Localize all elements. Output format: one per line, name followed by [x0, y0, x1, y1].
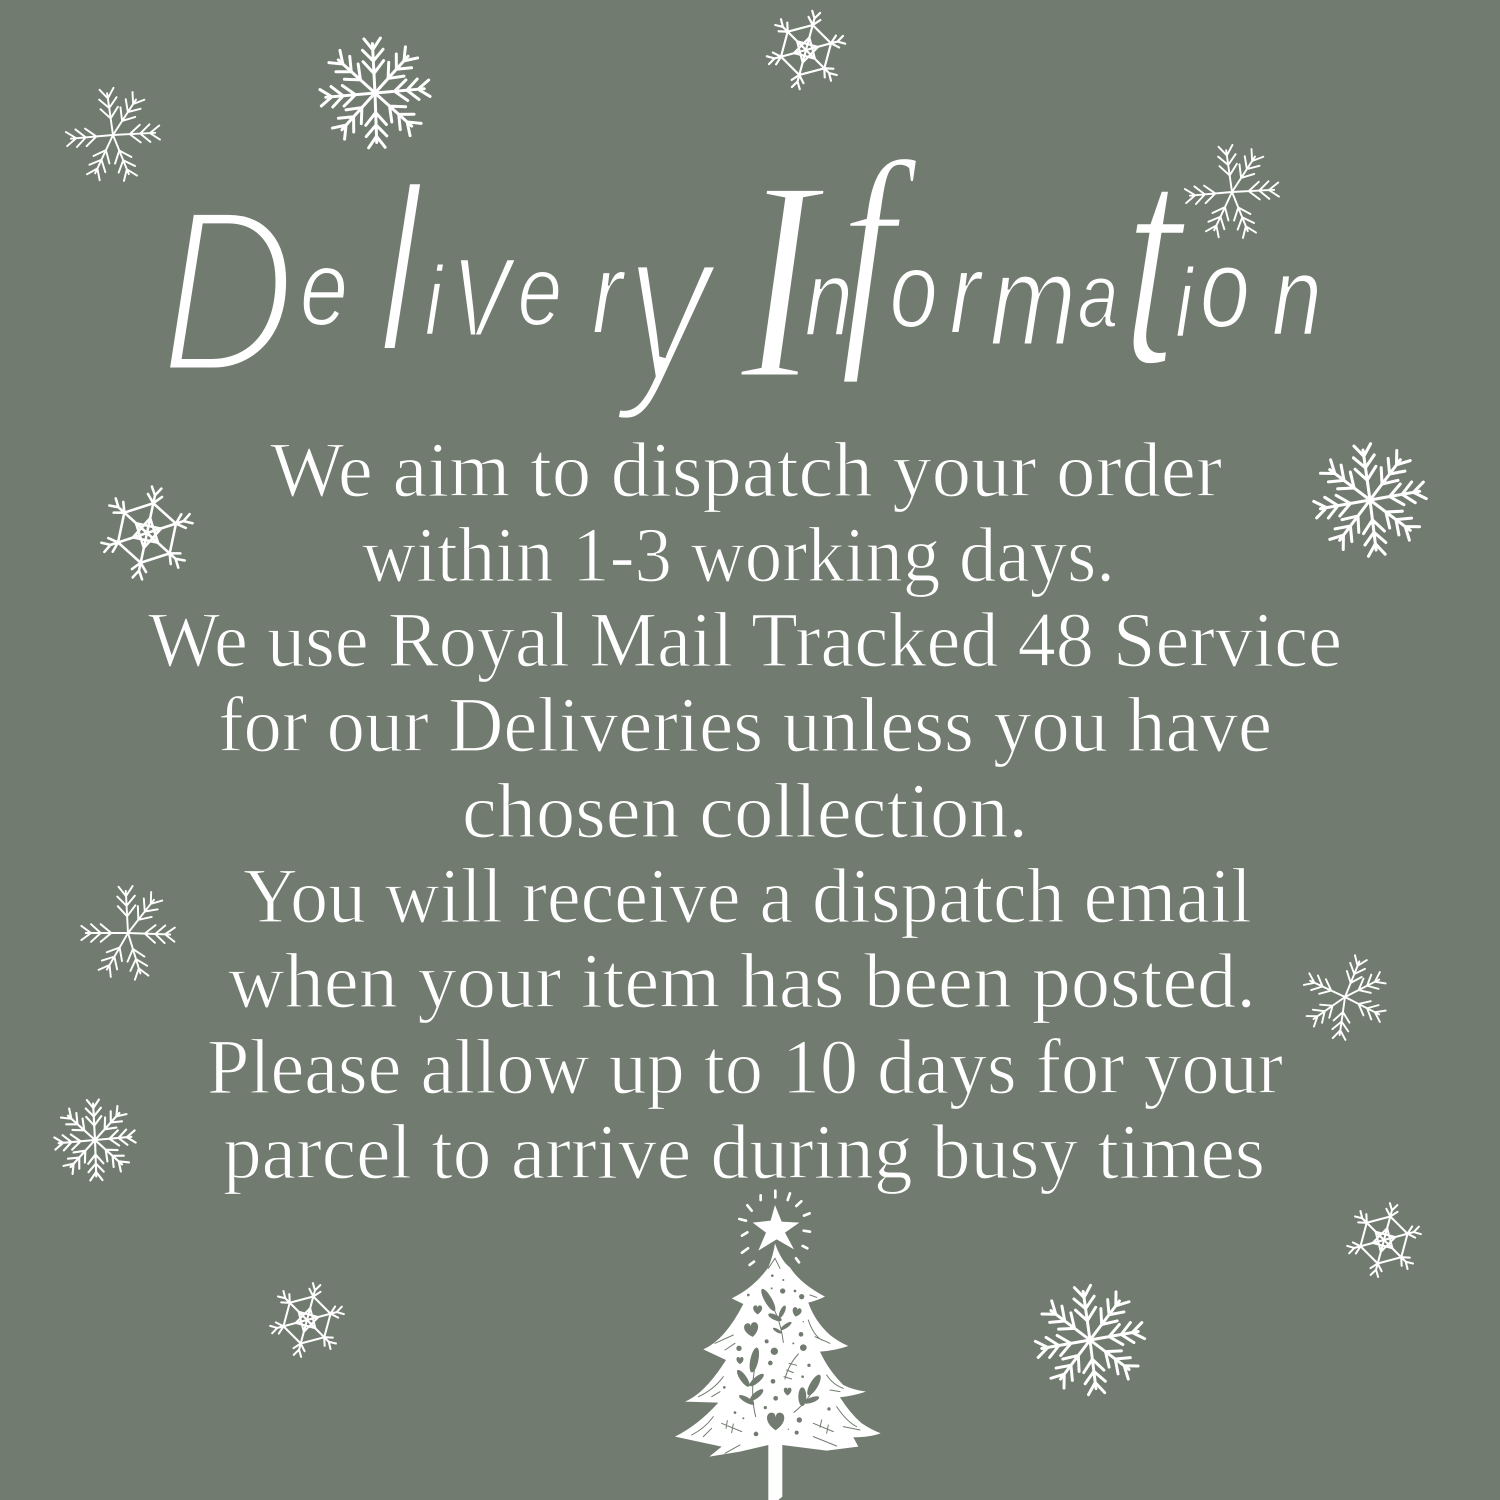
title: e [518, 236, 562, 347]
title: r [950, 230, 984, 358]
title [160, 112, 1322, 440]
icon: snowflake right lower [1341, 1195, 1427, 1285]
tree branches and edge lines [692, 1258, 860, 1453]
icon: snowflake top left [66, 88, 160, 182]
icon: snowflake top centre [760, 2, 852, 98]
title: r [592, 230, 626, 358]
icon: snowflake left lower [54, 1099, 136, 1181]
body text: chosen collection. [462, 767, 1028, 854]
body text: Please allow up to 10 days for your [207, 1023, 1283, 1110]
body text: We use Royal Mail Tracked 48 Service [148, 596, 1342, 683]
body text: for our Deliveries unless you have [218, 681, 1272, 768]
icon: snowflake bottom left [264, 1275, 350, 1365]
body text: within 1-3 working days. [362, 511, 1115, 598]
icon: snowflake right upper [1309, 439, 1431, 561]
title: i [425, 247, 444, 356]
icon: snowflake left upper [95, 479, 199, 587]
title: o [1200, 227, 1250, 351]
title: a [1078, 244, 1119, 347]
body text [148, 426, 1342, 1195]
title: t [1120, 117, 1189, 424]
body text: You will receive a dispatch email [243, 852, 1252, 939]
tree body [675, 1243, 881, 1500]
title: l [378, 139, 424, 403]
tree star [753, 1205, 799, 1251]
title: I [736, 122, 826, 440]
title: o [890, 229, 938, 350]
title: n [1272, 235, 1322, 359]
title: D [160, 160, 296, 423]
icon: snowflake left middle [77, 882, 179, 983]
tree ornaments [723, 1274, 831, 1436]
icon: snowflake top right [1185, 145, 1279, 239]
tree rays [739, 1191, 810, 1265]
icon: snowflake top centre left [320, 38, 430, 148]
icon: snowflake right middle [1287, 938, 1404, 1055]
title: m [990, 227, 1076, 373]
title: n [805, 237, 853, 358]
body text: when your item has been posted. [228, 937, 1256, 1024]
title: e [300, 227, 348, 348]
icon: snowflake bottom right [1031, 1281, 1149, 1399]
title: i [1175, 249, 1195, 358]
body text: parcel to arrive during busy times [223, 1108, 1265, 1195]
icon: christmas tree [675, 1191, 881, 1500]
body text: We aim to dispatch your order [270, 426, 1222, 513]
title: v [452, 201, 518, 369]
title: y [614, 184, 720, 423]
title: f [840, 112, 918, 385]
